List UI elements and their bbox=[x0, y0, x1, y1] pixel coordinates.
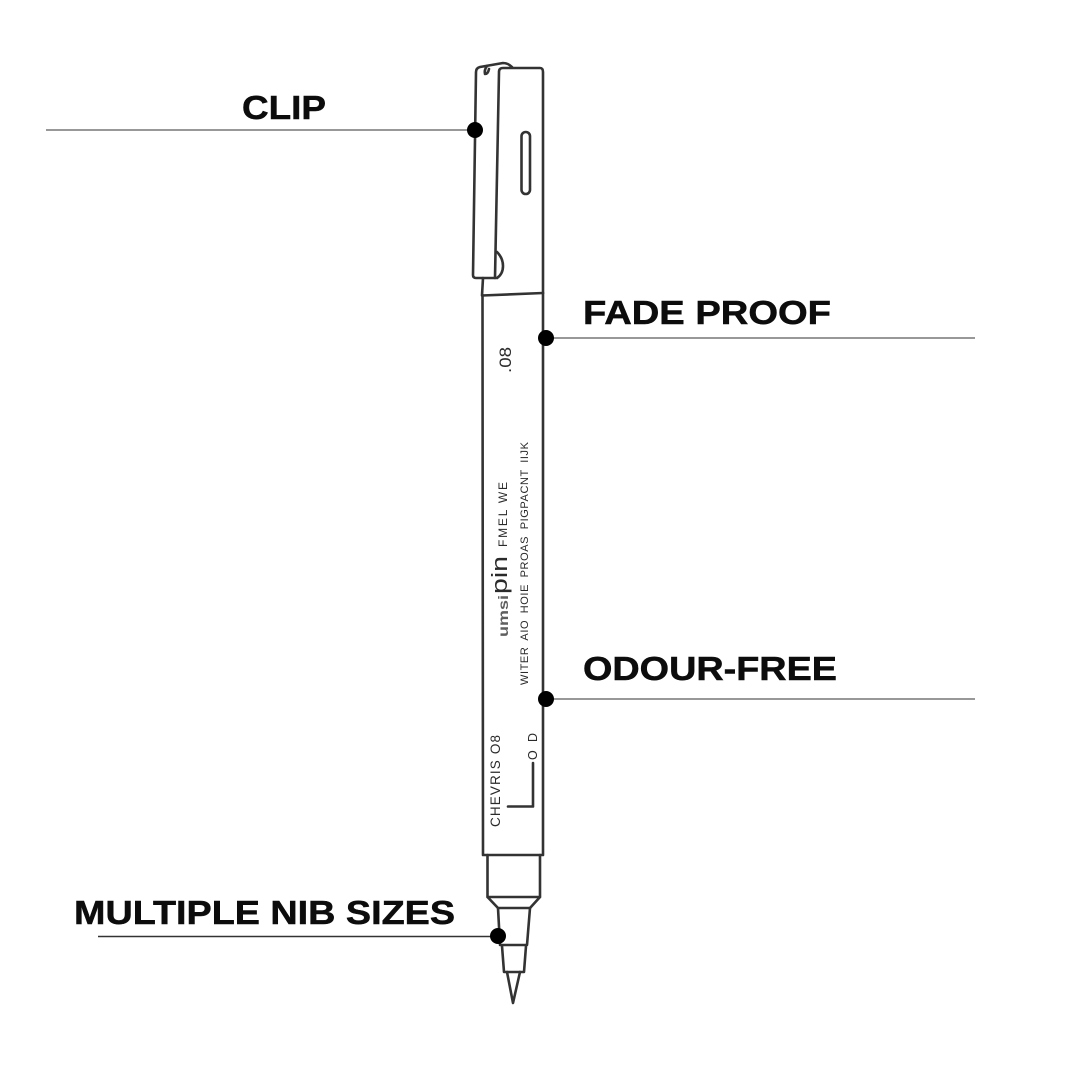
leader line: fade proof bbox=[546, 337, 975, 339]
leader line: clip bbox=[46, 129, 475, 131]
pen illustration bbox=[473, 63, 543, 1003]
callout: odour-free bbox=[538, 650, 975, 707]
barrel printed text: scale value: OD bbox=[526, 733, 540, 760]
barrel printed text: model: FMEL WE bbox=[496, 482, 510, 547]
pen tip bbox=[507, 972, 520, 1003]
leader line: multiple nib sizes bbox=[98, 936, 498, 938]
barrel printed text: brand: umsi bbox=[495, 595, 511, 637]
barrel printed text: pin: pin bbox=[487, 556, 512, 594]
barrel printed text: model number: CHEVRIS O8 bbox=[488, 735, 503, 827]
pen barrel bbox=[482, 293, 543, 855]
marker dot: multiple nib sizes bbox=[490, 928, 506, 944]
barrel printed text: size: .08 bbox=[496, 347, 515, 373]
size scale mark bbox=[508, 763, 533, 806]
marker dot: fade proof bbox=[538, 330, 554, 346]
pen cap bbox=[482, 68, 543, 296]
leader line: odour-free bbox=[546, 698, 975, 700]
barrel printed text: description: WITER AIO HOIE PROAS PIGPACNT IIJK bbox=[519, 441, 531, 685]
marker dot: clip bbox=[467, 122, 483, 138]
callout: multiple nib sizes bbox=[74, 894, 506, 944]
marker dot: odour-free bbox=[538, 691, 554, 707]
label: multiple nib sizes: MULTIPLE NIB SIZES bbox=[74, 894, 455, 931]
label: clip: CLIP bbox=[242, 89, 326, 126]
label: fade proof: FADE PROOF bbox=[583, 294, 831, 331]
pen nib holder bbox=[498, 908, 530, 972]
pen clip bbox=[473, 63, 512, 278]
callout: fade proof bbox=[538, 294, 975, 346]
callout: clip bbox=[46, 89, 483, 138]
pen grip section bbox=[488, 855, 540, 908]
label: odour-free: ODOUR-FREE bbox=[583, 650, 837, 687]
